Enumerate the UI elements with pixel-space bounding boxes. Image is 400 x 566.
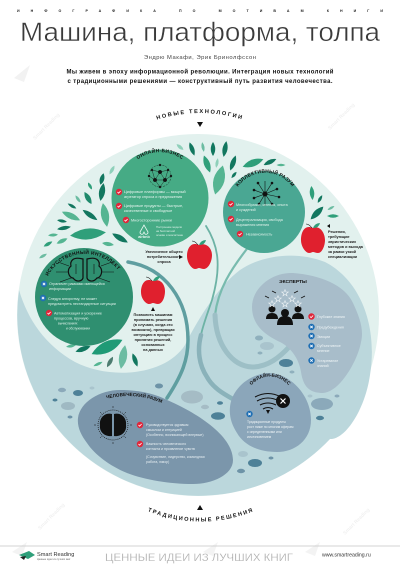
top label [156, 109, 242, 127]
label: decisions: (в случаях, когда это [133, 323, 173, 327]
label: heuristics: специализации [328, 255, 358, 259]
check 3 [123, 217, 129, 223]
cross 1 [308, 324, 315, 330]
panel: human mind: (Сочувствие, лидерство, командная [146, 455, 205, 459]
panel: collective mind: и суждений [236, 208, 256, 212]
panel: online business: качественные и свободные [124, 209, 172, 213]
check [308, 313, 315, 320]
check 1 [116, 189, 122, 195]
text: Smart Reading [37, 502, 66, 531]
panel: experts: мнение [317, 349, 329, 353]
cross 2 [308, 333, 315, 339]
panel: offline business: исчезновением [247, 435, 272, 439]
label: decisions: на данных [143, 348, 164, 352]
heading: ЧЕЛОВЕЧЕСКИЙ РАЗУМ [106, 392, 162, 403]
panel: artificial intelligence: и обслуживании [66, 326, 90, 330]
label: heuristics: методов и выхода [328, 245, 364, 249]
check [46, 310, 52, 316]
label: heuristics [327, 224, 364, 259]
label: decisions: Позволить машинам [134, 313, 173, 317]
label: decisions: возможно), превращая [131, 328, 175, 332]
kicker: ИНФОГРАФИКА ПО МОТИВАМ КНИГИ [17, 9, 383, 13]
panel: experts: Устаревание [317, 359, 338, 363]
label: demand growth: Увеличение общего [145, 250, 183, 254]
apple: decisions [141, 276, 165, 304]
panel: offline business: Традиционные продукты [247, 420, 287, 424]
cross 2 [40, 295, 46, 301]
top label: НОВЫЕ ТЕХНОЛОГИИ [156, 109, 242, 120]
text: Smart Reading [327, 102, 356, 131]
panel: collective mind: Многообразие, мнения, опыта [236, 203, 289, 207]
check 2 [228, 216, 234, 222]
lower blue region [17, 256, 372, 496]
panel: artificial intelligence: процессов, вручную [54, 316, 89, 320]
panel: experts: Субъективное [317, 344, 341, 348]
check 2 [116, 203, 122, 209]
icon: people and stars [265, 290, 305, 325]
heading: ОФЛАЙН-БИЗНЕС [250, 372, 290, 385]
icon: wifi and cross [255, 394, 290, 414]
label: decisions: интуицию в процесс [134, 333, 172, 337]
panel: experts: Глубокие знания [317, 315, 345, 319]
cross 1 [41, 281, 47, 287]
panel: online business: Цифровые продукты — быстрые, [124, 204, 183, 208]
icon: airbnb [140, 225, 148, 234]
main circle [17, 134, 379, 496]
icon: brain [94, 406, 132, 444]
panel: artificial intelligence: предсмотреть нестандартные ситуации [48, 302, 116, 306]
heading: ОНЛАЙН-БИЗНЕС [136, 148, 184, 159]
label: demand growth [145, 250, 183, 264]
label: heuristics: эвристических [328, 240, 357, 244]
label: heuristics: Решения, [328, 230, 346, 234]
icon: network [253, 181, 280, 206]
panel: human mind: (Особенно, возникающей впервые) [146, 433, 204, 437]
panel: offline business [230, 372, 311, 452]
panel: online business: агрегатор спроса и предложения [124, 195, 182, 199]
panel: online business: Построение модели [156, 225, 182, 229]
panel: human mind: Руководствуется здравым [146, 423, 189, 427]
bottom label: ТРАДИЦИОННЫЕ РЕШЕНИЯ [148, 508, 252, 522]
check 3 [237, 231, 243, 237]
panel: human mind: работа, юмор) [146, 460, 169, 464]
label: decisions [131, 307, 175, 352]
cross 4 [308, 357, 315, 364]
pebbles [52, 336, 340, 473]
logo: Ценные идеи из лучших книг [37, 558, 71, 561]
check 1 [228, 201, 234, 207]
panel: artificial intelligence: вычислениях [58, 322, 78, 326]
panel: artificial intelligence: информации [49, 287, 71, 291]
panel: collective mind: выражения мнения [236, 223, 269, 227]
panel: online business: Цифровые платформы — мощный [124, 190, 186, 194]
cross 3 [308, 343, 315, 349]
logo [19, 551, 74, 561]
heading: КОЛЛЕКТИВНЫЙ РАЗУМ [236, 169, 294, 187]
intro: Мы живем в эпоху информационной революции. Интеграция новых технологий [66, 68, 334, 76]
slogan: ЦЕННЫЕ ИДЕИ ИЗ ЛУЧШИХ КНИГ [105, 552, 293, 564]
panel: experts: Предубеждения [317, 326, 344, 330]
leaves [38, 141, 339, 370]
tree branches [128, 226, 290, 402]
panel: human mind: контакта и проявление чувств [146, 447, 195, 451]
panel: collective mind [223, 169, 305, 253]
panel: collective mind: Независимость [246, 232, 272, 236]
panel: online business: Многосторонние рынки [131, 218, 172, 222]
text: Smart Reading [32, 112, 61, 141]
icon: brain circuit [56, 258, 114, 282]
panel: collective mind: Децентрализация, свобода [236, 218, 284, 222]
check 1 [137, 422, 143, 428]
heading: ИСКУССТВЕННЫЙ ИНТЕЛЛЕКТ [45, 250, 120, 276]
panel: human mind: Важность человеческого [146, 442, 186, 446]
panel: artificial intelligence: Ограничен рамками имеющейся [49, 282, 105, 286]
panel: online business: на бесплатной [156, 229, 175, 233]
panel: online business [112, 148, 208, 246]
logo: Smart Reading [37, 552, 74, 558]
label: decisions: основанных [141, 343, 166, 347]
panel: experts: Эмоции [317, 335, 330, 339]
label: heuristics: требующие [328, 235, 350, 239]
label: heuristics: за рамки узкой [328, 250, 357, 254]
label: demand growth: потребительского [147, 255, 182, 259]
apple: demand [187, 240, 212, 269]
website: www.smartreading.ru [322, 552, 371, 558]
panel: human mind: смыслом и интуицией [146, 428, 182, 432]
title: Машина, платформа, толпа [20, 17, 381, 47]
panel: experts: знаний [317, 364, 329, 368]
authors: Эндрю Макафи, Эрик Бринолфссон [144, 55, 256, 61]
heading: ЭКСПЕРТЫ [279, 279, 307, 285]
panel: offline business: рост ниже по многим сферам [247, 425, 294, 429]
panel: artificial intelligence: Следуя алгоритму, не может [48, 297, 97, 301]
text: Smart Reading [342, 507, 371, 536]
check 2 [137, 441, 143, 447]
panel: experts [265, 279, 345, 368]
panel: online business: основе и экосистеме [156, 233, 184, 237]
label: demand growth: спроса [157, 260, 172, 264]
cross [246, 411, 253, 417]
header: с традиционными решениями — конструктивный путь развития человечества. [68, 78, 333, 85]
panel: artificial intelligence: Автоматизация и ускорение [54, 312, 102, 316]
panel: human mind [78, 390, 233, 484]
apple: heuristics [301, 223, 325, 253]
panel: experts blob [252, 273, 362, 393]
footer [0, 546, 400, 564]
label: decisions: принимать решения [134, 318, 172, 322]
icon: network sphere [148, 164, 172, 188]
label: decisions: принятия решений, [135, 338, 171, 342]
panel: artificial intelligence [35, 248, 133, 346]
panel: online business: airbnb [138, 235, 150, 239]
header [17, 9, 383, 85]
panel: offline business: с определенными или [247, 430, 282, 434]
